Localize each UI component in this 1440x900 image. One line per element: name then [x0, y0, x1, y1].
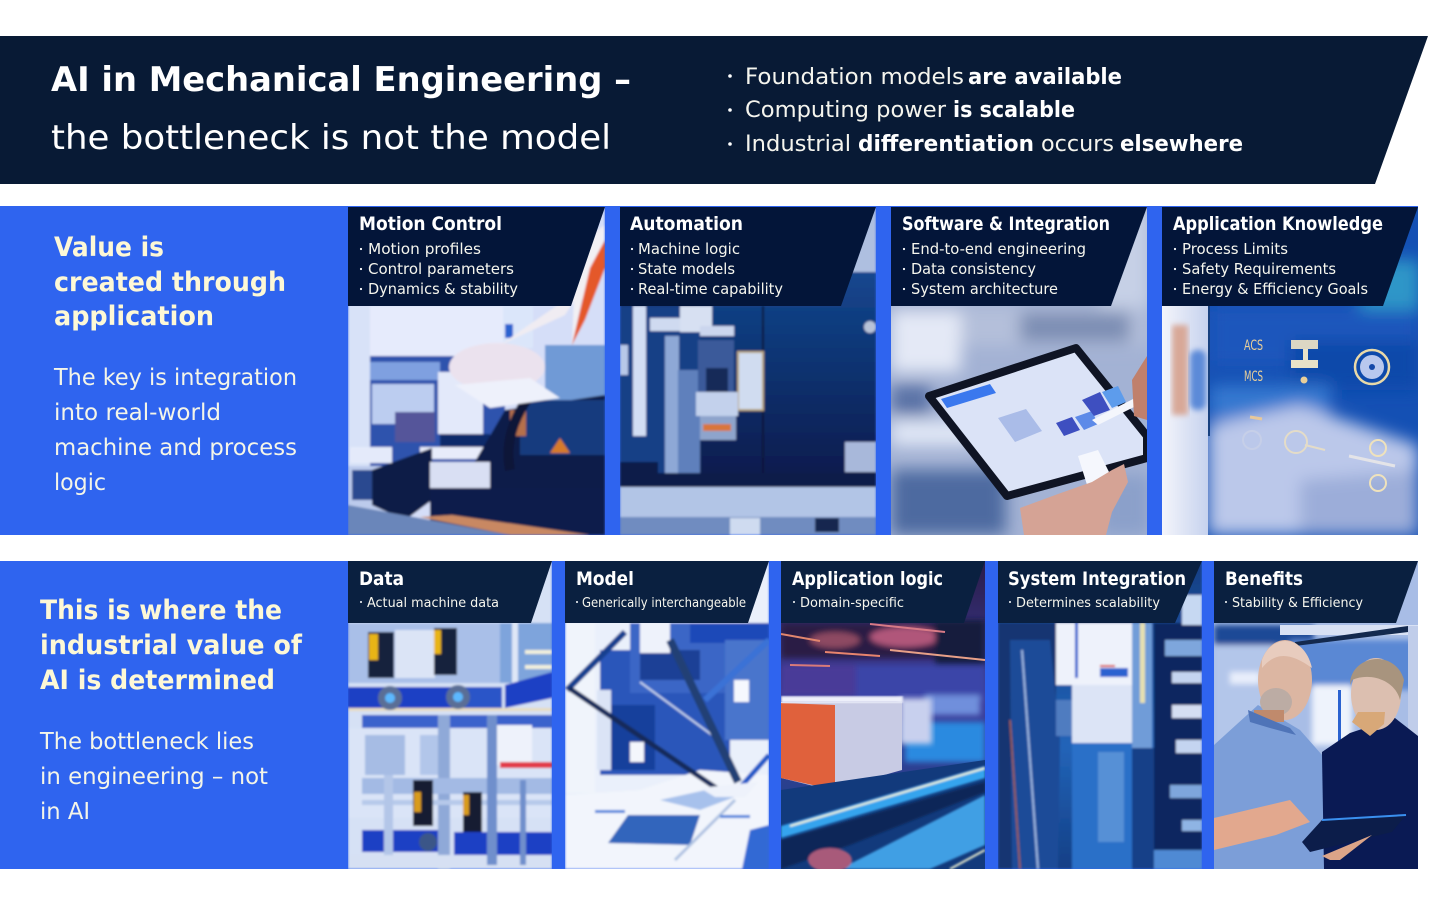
- card bullets: System architecture: [911, 280, 1058, 298]
- panel icons: [1243, 340, 1395, 491]
- row 2 heading: AI is determined: [40, 665, 275, 696]
- card: Data: [348, 561, 552, 870]
- header bullet list: Foundation models: [745, 65, 964, 90]
- row 2 heading: industrial value of: [40, 630, 302, 661]
- card bullet: Actual machine data: [367, 595, 499, 611]
- card bullets: Safety Requirements: [1182, 260, 1336, 278]
- card bullets: [631, 240, 783, 298]
- card: Model: [565, 561, 769, 869]
- card bullets: Dynamics & stability: [368, 280, 518, 298]
- card: Automation: [620, 207, 876, 535]
- card title: System Integration: [1008, 568, 1186, 590]
- card title: Data: [359, 568, 404, 590]
- photo: automation cell: [620, 207, 876, 535]
- card bullet: Determines scalability: [1016, 595, 1160, 611]
- card title: Model: [576, 568, 634, 590]
- photo: parcel on fast conveyor: [781, 561, 985, 872]
- card title: Benefits: [1225, 568, 1303, 590]
- row 1 heading: created through: [54, 267, 286, 298]
- card header panel: [998, 561, 1202, 623]
- card header panel: [348, 207, 605, 306]
- card: Benefits: [1214, 561, 1418, 869]
- header bullet list: Industrial: [745, 132, 851, 157]
- row 1 body text: The key is integration: [53, 365, 297, 391]
- card bullet: Generically interchangeable: [582, 595, 746, 611]
- card header panel: [891, 207, 1147, 306]
- card bullets: [1174, 240, 1368, 298]
- row 1 heading: application: [54, 301, 214, 332]
- header bullet list: [728, 65, 1243, 157]
- card title: Automation: [630, 213, 743, 235]
- header bullet list: elsewhere: [1120, 132, 1243, 157]
- card bullets: Real-time capability: [638, 280, 783, 298]
- card title: Application logic: [792, 568, 943, 590]
- card bullets: End-to-end engineering: [911, 240, 1086, 258]
- row 2: industrial value of AI: [0, 561, 1418, 872]
- row 1 body text: machine and process: [54, 435, 297, 461]
- row 1 heading: Value is: [54, 232, 164, 263]
- figure: bald man in blue polo: [1214, 640, 1324, 869]
- photo: two engineers with tablet: [1214, 561, 1418, 869]
- figure: man in navy polo: [1320, 658, 1418, 869]
- header banner: [0, 36, 1428, 184]
- card: Motion Control: [348, 207, 605, 535]
- card bullets: Data consistency: [911, 260, 1036, 278]
- row 2 body text: in AI: [40, 799, 90, 825]
- card header panel: [348, 561, 552, 623]
- card title: Motion Control: [359, 213, 502, 235]
- row 1 heading: [54, 232, 286, 332]
- card bullet: Domain-specific: [800, 595, 904, 611]
- row 1 body text: logic: [54, 470, 106, 496]
- photo: sensors on conveyor frame: [348, 561, 552, 870]
- photo: tablet in hand: [891, 207, 1150, 535]
- row 1 body text: into real-world: [54, 400, 221, 426]
- photo: robot arm cell: [348, 207, 605, 535]
- card bullets: State models: [638, 260, 735, 278]
- row 2 body text: The bottleneck lies: [39, 729, 254, 755]
- row 1 body text: [53, 365, 297, 496]
- title: AI in Mechanical Engineering –: [51, 60, 631, 100]
- photo: automated storage aisle: [998, 561, 1202, 869]
- title: the bottleneck is not the model: [51, 118, 611, 158]
- tablet: [1302, 815, 1406, 852]
- card header panel: [781, 561, 985, 623]
- row 2 body text: in engineering – not: [40, 764, 268, 790]
- card bullets: Control parameters: [368, 260, 514, 278]
- photo: delta robot: [565, 561, 769, 869]
- card bullets: Motion profiles: [368, 240, 481, 258]
- card bullet: Stability & Efficiency: [1232, 595, 1363, 611]
- row 2 heading: This is where the: [40, 595, 282, 626]
- card header panel: [620, 207, 876, 306]
- card bullets: Energy & Efficiency Goals: [1182, 280, 1368, 298]
- header bullet list: occurs: [1041, 132, 1114, 157]
- card bullets: [360, 240, 518, 298]
- row 1: value through application: [0, 206, 1420, 535]
- photo: process icons on glass panel: ACS: [1244, 338, 1263, 354]
- card header panel: [1214, 561, 1418, 623]
- card bullets: Machine logic: [638, 240, 740, 258]
- card: Application logic: [781, 561, 985, 872]
- card header panel: [565, 561, 769, 623]
- row 2 body text: [39, 729, 268, 825]
- title: [51, 60, 631, 158]
- card header panel: [1162, 207, 1418, 306]
- card: System Integration: [998, 561, 1202, 869]
- row 2 heading: [40, 595, 302, 696]
- card bullets: Process Limits: [1182, 240, 1288, 258]
- card title: Application Knowledge: [1173, 213, 1383, 235]
- photo: process icons on glass panel: MCS: [1244, 369, 1263, 385]
- photo: process icons on glass panel: [1162, 207, 1420, 535]
- card bullets: [903, 240, 1086, 298]
- header bullet list: is scalable: [953, 98, 1075, 123]
- header bullet list: Computing power: [745, 98, 947, 123]
- header bullet list: differentiation: [858, 132, 1034, 157]
- card title: Software & Integration: [902, 213, 1110, 235]
- card: Application Knowledge: [1162, 207, 1420, 535]
- card: Software & Integration: [891, 207, 1150, 535]
- header bullet list: are available: [968, 65, 1122, 90]
